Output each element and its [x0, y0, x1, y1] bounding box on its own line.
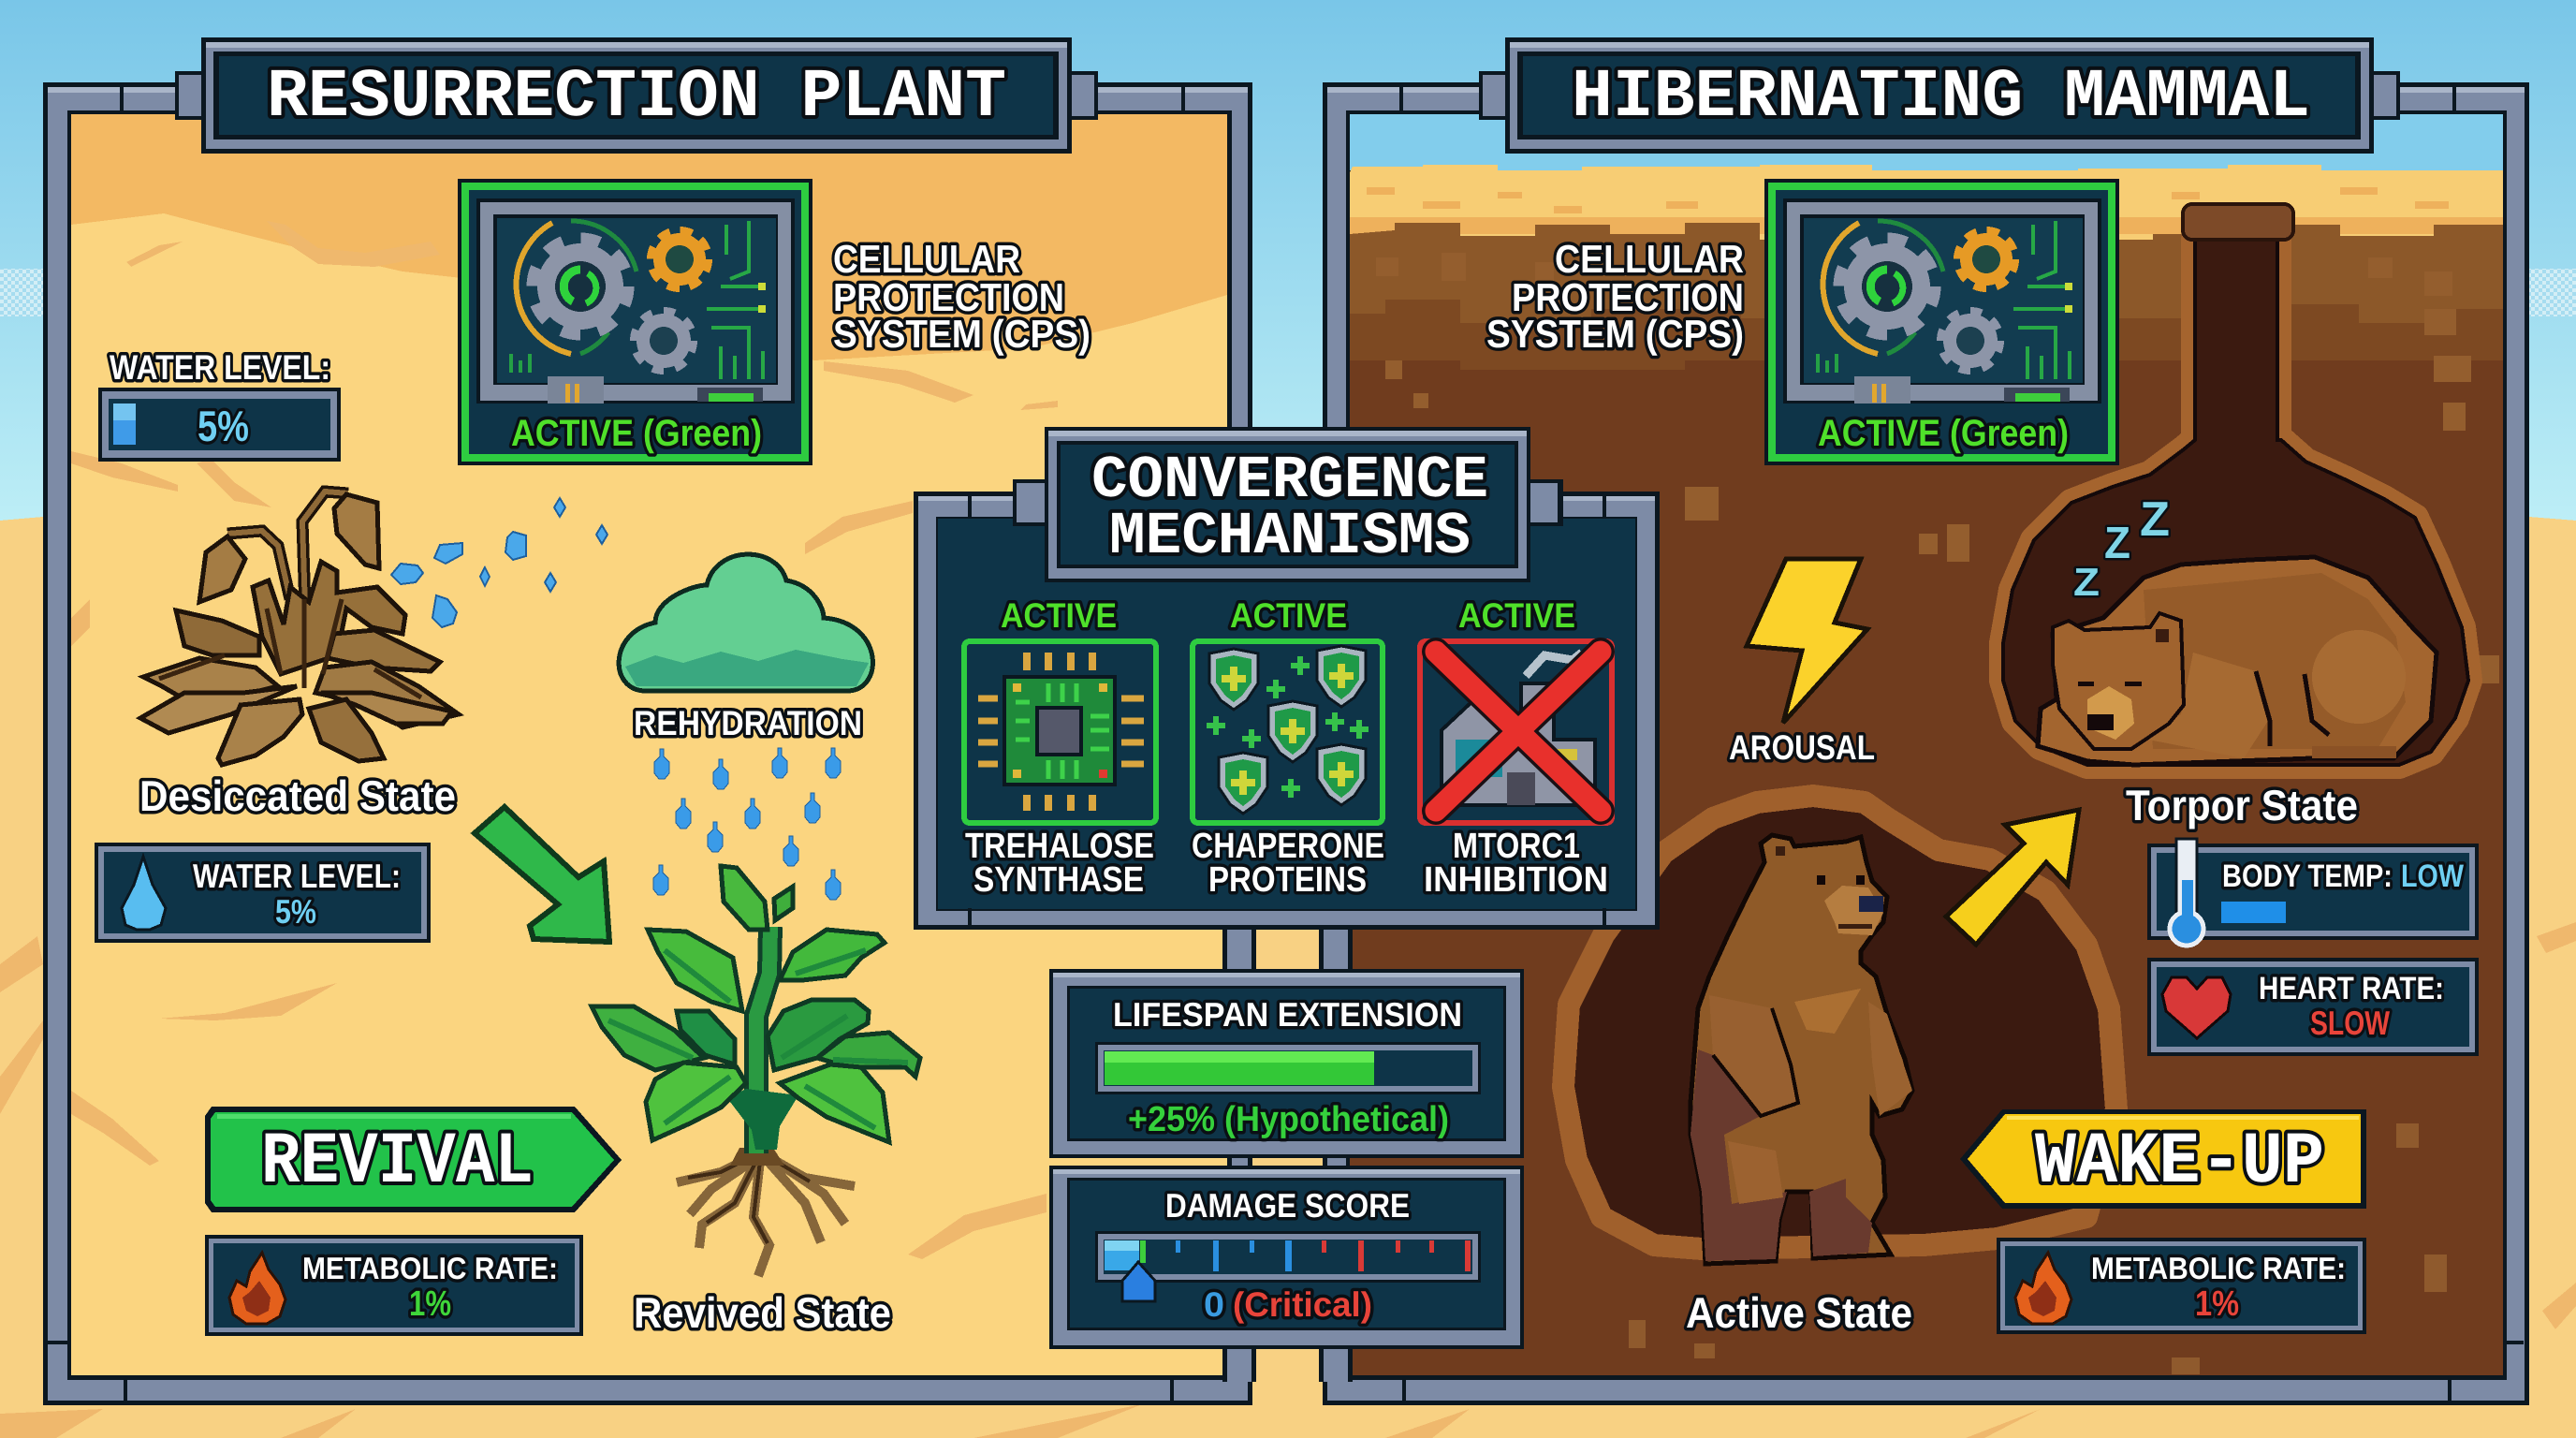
mechanism labels: SYNTHASE — [973, 860, 1144, 900]
card: body temp: LOW — [2401, 858, 2465, 894]
icon: desiccated plant — [140, 492, 459, 765]
label: CPS right: CELLULAR — [1555, 237, 1744, 281]
label: CPS left: PROTECTION — [833, 275, 1064, 319]
label: CPS left: CELLULAR — [833, 237, 1020, 281]
panel: damage score — [1049, 1166, 1524, 1349]
card: body temp — [2147, 839, 2479, 946]
banner: revival — [205, 1107, 622, 1212]
CPS status left: ACTIVE (Green) — [511, 413, 762, 454]
label: CPS right — [1486, 237, 1744, 356]
title: convergence mechanisms — [1013, 427, 1563, 582]
background: dithered haze band — [0, 269, 2576, 316]
mechanism labels: INHIBITION — [1424, 860, 1608, 900]
connector pipes under convergence panel — [1222, 927, 1353, 1382]
label: rehydration: REHYDRATION — [634, 704, 862, 742]
arrow: green down-right — [475, 807, 609, 942]
icon: sleeping bear — [2038, 557, 2437, 765]
icon: sleep Z letters — [2073, 492, 2170, 604]
card: water level: 5% — [275, 892, 316, 931]
title: hibernating mammal: HIBERNATING MAMMAL — [1572, 58, 2310, 136]
banner: wake-up: WAKE-UP — [2035, 1122, 2324, 1204]
card: metabolic rate right — [1997, 1238, 2366, 1334]
status labels: ACTIVE — [1458, 596, 1575, 635]
right panel soil — [1350, 223, 2503, 1375]
status labels: ACTIVE — [1230, 596, 1347, 635]
label: CPS left — [833, 237, 1090, 356]
title: hibernating mammal — [1479, 37, 2400, 154]
icon: sleep Z letters: Z — [2140, 492, 2170, 547]
card: heart rate: SLOW — [2310, 1004, 2390, 1042]
icon: CPS monitor right — [1764, 179, 2119, 465]
label: arousal: AROUSAL — [1729, 728, 1875, 767]
mechanism labels: CHAPERONE — [1192, 827, 1384, 866]
card: body temp: BODY TEMP: — [2222, 858, 2393, 894]
burrow: active chamber — [1563, 796, 2116, 1249]
gauge: water level top: 5% — [198, 402, 249, 450]
card: water level — [95, 843, 431, 943]
label: CPS right: SYSTEM (CPS) — [1486, 312, 1744, 356]
icon: heart — [2162, 977, 2231, 1038]
progress bar: lifespan — [1095, 1042, 1481, 1094]
plant roots — [677, 1153, 855, 1276]
right panel sky — [1350, 114, 2503, 170]
card: metabolic rate left: 1% — [409, 1284, 451, 1324]
icon: sleep Z letters: Z — [2073, 560, 2100, 604]
title: resurrection plant — [175, 37, 1098, 154]
gauge: water level top — [98, 388, 341, 462]
background: outer sand — [0, 517, 2576, 1438]
icon: lightning bolt — [1747, 559, 1867, 723]
mechanism labels — [965, 827, 1608, 900]
banner: wake-up — [1960, 1109, 2366, 1209]
label: active state: Active State — [1686, 1288, 1912, 1337]
panel: convergence mechanisms — [914, 427, 1660, 930]
icon: thermometer — [2170, 839, 2203, 946]
status labels — [1001, 596, 1575, 635]
dune streaks — [71, 221, 1058, 1259]
left panel sand floor — [71, 114, 1227, 1375]
rain drops — [653, 748, 841, 900]
sand strip shading — [1350, 187, 2503, 234]
card: metabolic rate left: METABOLIC RATE: — [302, 1251, 558, 1285]
title: convergence mechanisms: MECHANISMS — [1109, 504, 1471, 571]
panel: lifespan extension — [1049, 969, 1524, 1158]
mechanism labels: PROTEINS — [1208, 860, 1367, 900]
icon: water drop — [122, 857, 166, 930]
title: convergence mechanisms: CONVERGENCE — [1091, 448, 1488, 515]
icon: CPS monitor left — [458, 179, 812, 465]
CPS status right: ACTIVE (Green) — [1818, 413, 2069, 454]
arrow: yellow up-right — [1946, 810, 2079, 945]
soil blotches — [1376, 253, 2499, 683]
icon: mTORC1 factory crossed out — [1420, 641, 1612, 823]
icon: trehalose synthase chip — [964, 641, 1156, 823]
label: CPS right: PROTECTION — [1512, 275, 1744, 319]
panel: resurrection plant — [43, 37, 1252, 1405]
gauge: damage — [1095, 1231, 1481, 1301]
status labels: ACTIVE — [1001, 596, 1117, 635]
panel: lifespan extension: LIFESPAN EXTENSION — [1113, 995, 1462, 1034]
icon: chaperone shields — [1193, 641, 1383, 823]
card: water level: WATER LEVEL: — [193, 857, 401, 895]
burrow: torpor chamber — [2003, 204, 2468, 765]
panel: lifespan extension: +25% (Hypothetical) — [1128, 1100, 1449, 1139]
label: water level top: WATER LEVEL: — [110, 348, 330, 387]
title: resurrection plant: RESURRECTION PLANT — [267, 58, 1006, 136]
panel: damage score: 0 — [1204, 1285, 1224, 1324]
card: metabolic rate right: 1% — [2195, 1284, 2239, 1324]
label: CPS left: SYSTEM (CPS) — [833, 312, 1090, 356]
banner: revival: REVIVAL — [261, 1122, 534, 1204]
label: desiccated state: Desiccated State — [139, 771, 456, 820]
label: torpor state: Torpor State — [2126, 781, 2358, 829]
icon: sleep Z letters: Z — [2104, 519, 2130, 568]
icon: flame — [229, 1253, 285, 1324]
mechanism labels: TREHALOSE — [965, 827, 1154, 866]
panel: damage score: DAMAGE SCORE — [1165, 1186, 1410, 1225]
icon: standing bear — [1690, 835, 1912, 1264]
icon: flame right — [2015, 1253, 2071, 1324]
frame: left panel pipe — [43, 82, 1252, 1405]
card: heart rate — [2147, 958, 2479, 1056]
mechanism labels: MTORC1 — [1453, 827, 1580, 866]
icon: green rehydration cloud — [619, 554, 872, 691]
panel: hibernating mammal — [1323, 37, 2529, 1405]
card: heart rate: HEART RATE: — [2259, 971, 2444, 1006]
water droplets rising — [391, 498, 607, 627]
frame: right panel pipe — [1323, 82, 2529, 1405]
panel: damage score: (Critical) — [1233, 1285, 1372, 1324]
right panel sand strip — [1350, 165, 2503, 243]
card: metabolic rate left — [205, 1235, 583, 1336]
left panel upper dune — [71, 114, 1227, 360]
card: metabolic rate right: METABOLIC RATE: — [2091, 1251, 2346, 1285]
label: revived state: Revived State — [634, 1288, 891, 1337]
icon: revived plant — [592, 866, 920, 1276]
background: sky — [0, 0, 2576, 524]
